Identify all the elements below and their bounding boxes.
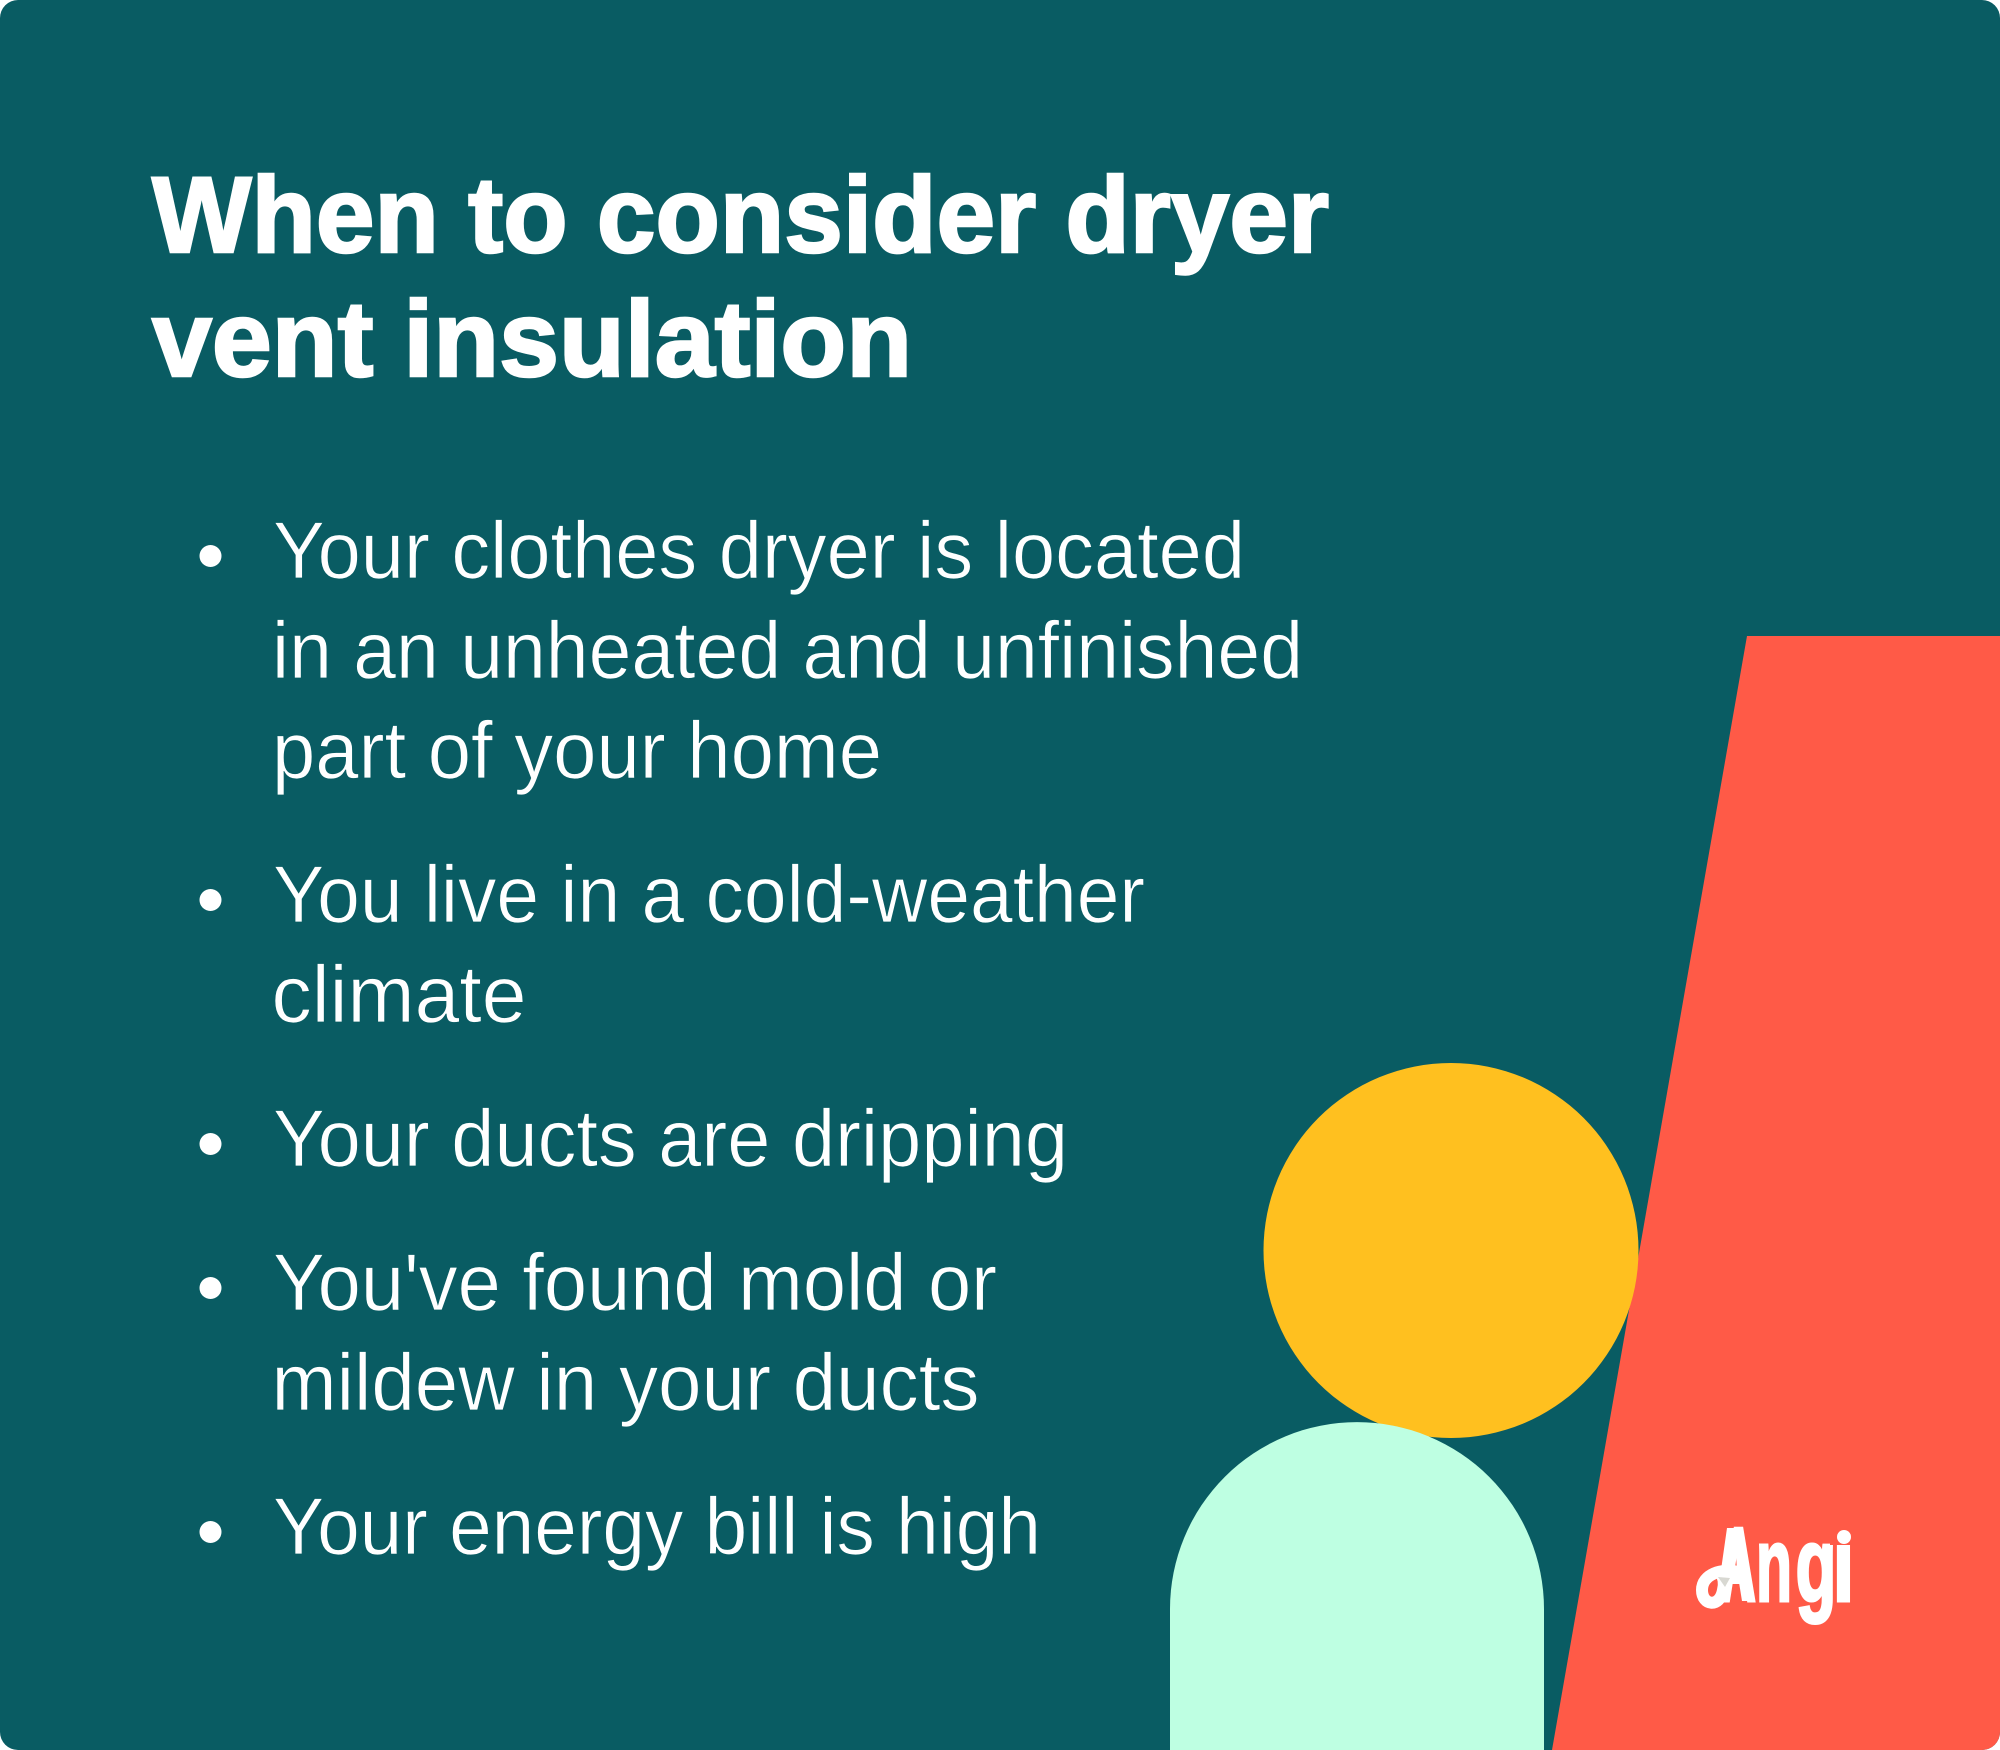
title: vent insulation <box>152 278 912 399</box>
list item: mold or mildew <box>200 1238 997 1428</box>
logo: Angi <box>1702 1506 1858 1624</box>
shape: yellow circle <box>1264 1063 1638 1438</box>
logo: Angi: i <box>1832 1506 1854 1624</box>
decorative shapes <box>1170 636 2000 1750</box>
list item: mold or mildew: mildew in your ducts <box>272 1338 980 1428</box>
list item: unheated location: in an unheated and unfinished <box>272 606 1303 696</box>
bullet list <box>200 506 1303 1572</box>
shape: mint arch <box>1170 1422 1544 1750</box>
list item: cold climate: climate <box>272 950 526 1040</box>
list item: unheated location: part of your home <box>272 706 882 796</box>
logo: Angi: n <box>1756 1506 1792 1624</box>
shape: coral trapezoid <box>1552 636 2000 1750</box>
logo: Angi: A <box>1721 1506 1756 1624</box>
list item: mold or mildew: You've found mold or <box>273 1238 997 1328</box>
title: When to consider dryer <box>152 154 1329 275</box>
logo: Angi: g <box>1796 1506 1836 1624</box>
list item: unheated location: Your clothes dryer is located <box>273 506 1245 596</box>
list item: cold climate <box>200 850 1145 1040</box>
list item: cold climate: You live in a cold-weather <box>273 850 1145 940</box>
list item: high energy bill: Your energy bill is high <box>273 1482 1041 1572</box>
title <box>152 154 1329 399</box>
list item: unheated location <box>200 506 1303 796</box>
list item: dripping ducts: Your ducts are dripping <box>273 1094 1068 1184</box>
